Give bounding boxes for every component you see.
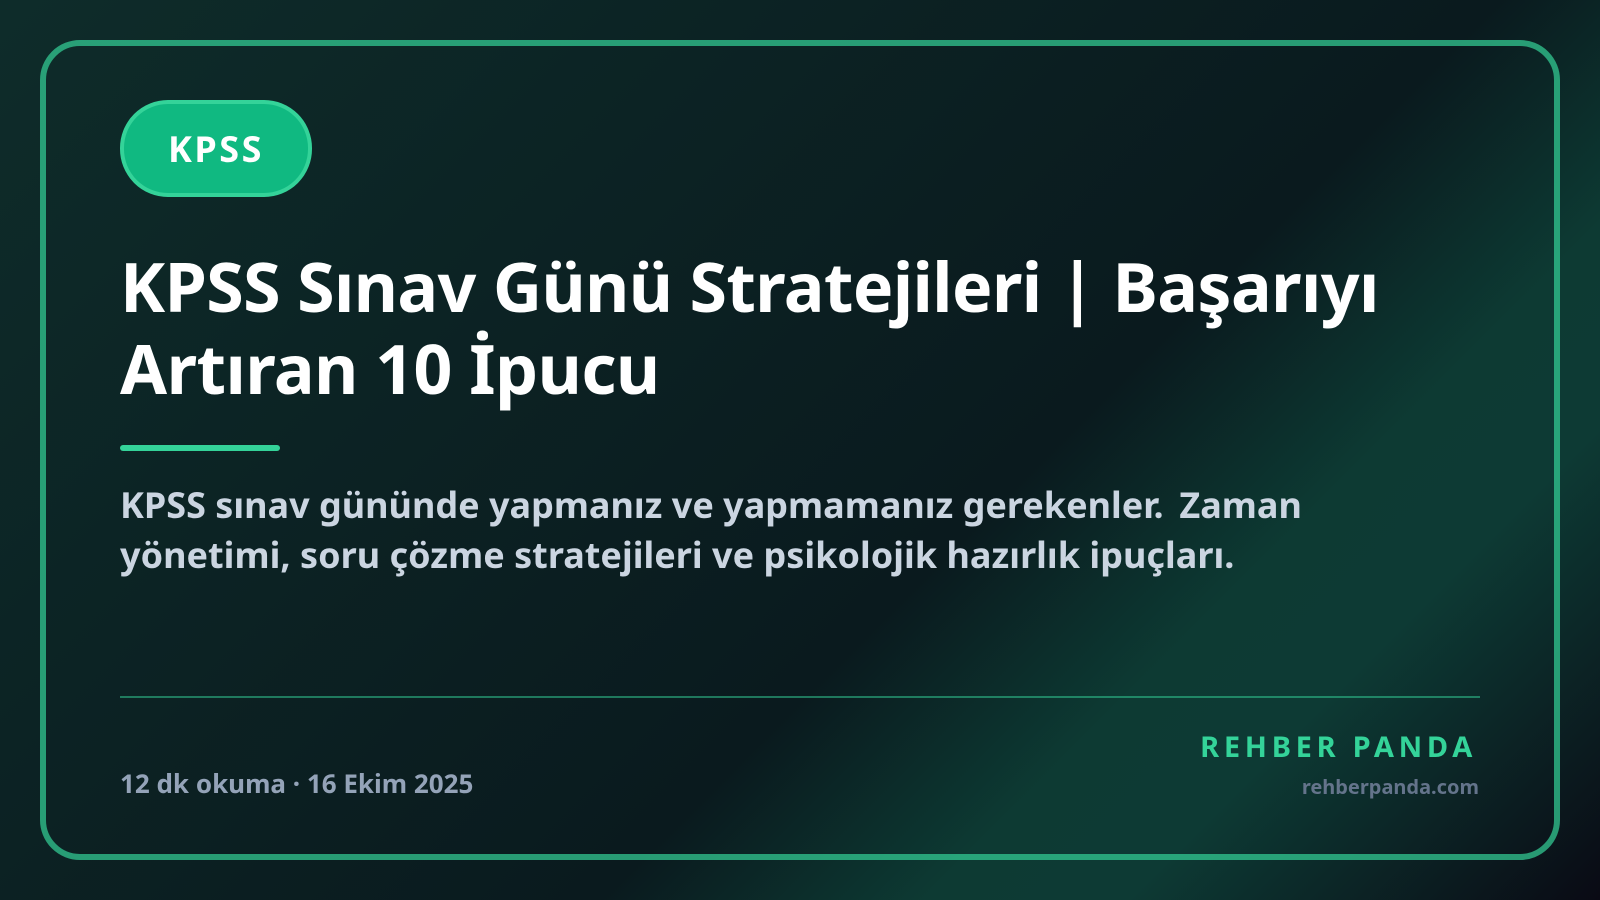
brand name: REHBER PANDA <box>1200 727 1477 766</box>
brand url: rehberpanda.com <box>1302 773 1479 800</box>
subtitle <box>120 480 1302 579</box>
badge: KPSS: KPSS <box>168 124 264 173</box>
meta: reading time and date: 12 dk okuma · 16 Ekim 2025 <box>120 765 473 801</box>
accent bar <box>120 445 280 451</box>
subtitle: yönetimi, soru çözme stratejileri ve psikolojik hazırlık ipuçları. <box>120 530 1234 579</box>
title <box>120 239 1379 414</box>
title: KPSS Sınav Günü Stratejileri | Başarıyı <box>120 239 1379 332</box>
badge: KPSS <box>120 100 312 197</box>
subtitle: KPSS sınav gününde yapmanız ve yapmamanız gerekenler. Zaman <box>120 480 1302 529</box>
divider <box>120 696 1480 698</box>
title: Artıran 10 İpucu <box>120 321 660 414</box>
